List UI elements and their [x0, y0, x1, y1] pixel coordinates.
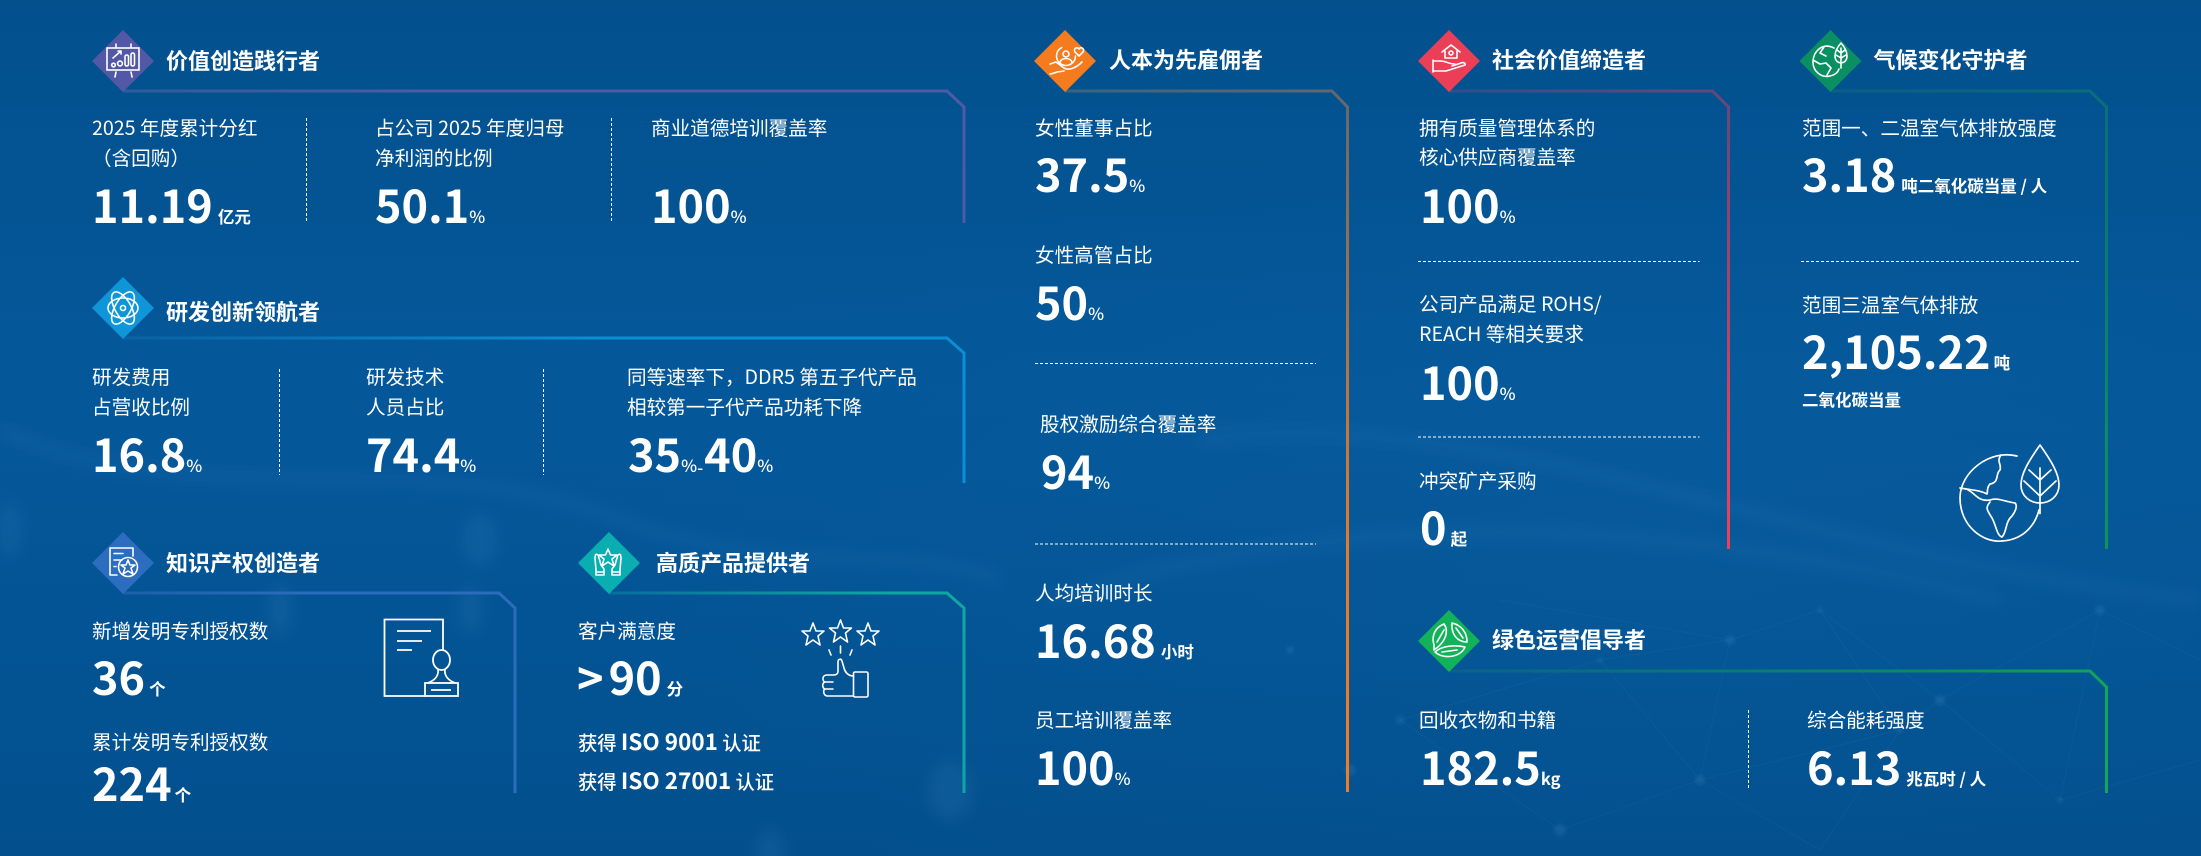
metric: 净利润比例: 50.1%: [375, 171, 485, 236]
metric: 回收衣物和书籍: [1419, 704, 1561, 798]
panel frame line: [123, 593, 515, 793]
panel: 研发创新领航者: [92, 277, 964, 485]
metric: 净利润比例: [375, 112, 564, 236]
metric: ROHS/REACH: 公司产品满足 ROHS/: [1419, 288, 1602, 317]
ISO certifications: [578, 725, 774, 796]
metric: 净利润比例: 净利润的比例: [375, 142, 493, 171]
metric: 分红: 2025 年度累计分红: [92, 112, 257, 141]
metric: 女性董事占比: [1035, 112, 1153, 205]
metric: DDR5 功耗: 相较第一子代产品功耗下降: [627, 391, 862, 420]
metric: 新增发明专利: 36个: [92, 643, 166, 708]
heading: 气候变化守护者: [1874, 43, 2028, 75]
heading: 高质产品提供者: [656, 546, 810, 578]
metric: 新增发明专利: 新增发明专利授权数: [92, 615, 269, 644]
icon: stars and thumbs up: [802, 620, 879, 697]
metric: 女性高管占比: [1035, 239, 1153, 333]
metric: 研发技术人员: 研发技术: [366, 361, 444, 390]
metric: 商业道德培训覆盖率: 商业道德培训覆盖率: [651, 112, 827, 141]
metric: 综合能耗强度: 综合能耗强度: [1807, 704, 1925, 733]
heading: 价值创造践行者: [166, 44, 320, 76]
panel: 知识产权创造者: [92, 532, 515, 814]
metric: DDR5 功耗: 35%: [628, 420, 697, 485]
metric: 研发费用: 占营收比例: [92, 391, 190, 420]
metric: 客户满意度: 客户满意度: [578, 615, 676, 644]
icon: house in hand: [1418, 30, 1480, 92]
ISO certifications: 获得 ISO 27001 认证: [578, 764, 774, 796]
icon: globe and leaf small: [1800, 30, 1862, 92]
heading: 绿色运营倡导者: [1492, 623, 1646, 655]
icon: people in hand: [1034, 30, 1096, 92]
metric: 研发技术人员: [366, 361, 476, 485]
panel frame line: [1065, 91, 1348, 792]
metric: 核心供应商: 拥有质量管理体系的: [1419, 112, 1595, 141]
metric: 分红: 11.19 亿元: [92, 171, 251, 236]
metric: 综合能耗强度: 6.13 兆瓦时 / 人: [1807, 733, 1987, 798]
metric: 范围三: 2,105.22吨: [1802, 317, 2011, 382]
panel: 社会价值缔造者: [1418, 30, 1728, 558]
metric: 冲突矿产采购: [1419, 465, 1537, 558]
icon: presentation board: [92, 30, 154, 92]
heading: 人本为先雇佣者: [1109, 43, 1263, 75]
metric: ROHS/REACH: [1419, 288, 1602, 413]
panel: 价值创造践行者: [92, 30, 964, 236]
metric: 分红: （含回购）: [92, 142, 190, 171]
metric: 回收衣物和书籍: 回收衣物和书籍: [1419, 704, 1556, 733]
ISO certifications: 获得 ISO 9001 认证: [578, 725, 761, 757]
metric: DDR5 功耗: %: [757, 452, 773, 477]
metric: DDR5 功耗: -: [697, 454, 703, 479]
metric: 回收衣物和书籍: 182.5kg: [1420, 733, 1561, 798]
metric: 女性高管占比: 50%: [1035, 268, 1104, 333]
metric: 女性董事占比: 女性董事占比: [1035, 112, 1153, 141]
metric: 范围一二: 范围一、二温室气体排放强度: [1802, 112, 2057, 141]
metric: 商业道德培训覆盖率: 100%: [651, 171, 747, 236]
icon: atom: [92, 277, 154, 339]
metric: 商业道德培训覆盖率: [651, 112, 827, 236]
metric: 净利润比例: 占公司 2025 年度归母: [375, 112, 564, 141]
metric: 股权激励: 94%: [1041, 437, 1110, 502]
heading: 研发创新领航者: [166, 295, 320, 327]
metric: ROHS/REACH: 100%: [1420, 348, 1516, 413]
icon: hands and star: [578, 532, 640, 594]
icon: certificate: [92, 532, 154, 594]
metric: 股权激励: 股权激励综合覆盖率: [1040, 408, 1216, 437]
metric: 研发技术人员: 74.4%: [366, 420, 476, 485]
metric: 核心供应商: 核心供应商覆盖率: [1419, 141, 1576, 170]
metric: 综合能耗强度: [1807, 704, 1987, 798]
heading: 社会价值缔造者: [1492, 43, 1646, 75]
metric: 冲突矿产采购: 0起: [1420, 493, 1468, 558]
panel frame line: [1449, 91, 1728, 549]
metric: 核心供应商: [1419, 112, 1595, 236]
metric: 分红: [92, 112, 257, 236]
metric: 女性董事占比: 37.5%: [1035, 140, 1145, 205]
metric: 人均培训时长: [1035, 577, 1194, 671]
panel frame line: [123, 91, 964, 223]
icon: document and stamp: [384, 620, 458, 696]
metric: 人均培训时长: 人均培训时长: [1035, 577, 1153, 606]
metric: ROHS/REACH: REACH 等相关要求: [1419, 318, 1584, 347]
panel: 气候变化守护者: [1800, 30, 2106, 549]
metric: 员工培训覆盖率: 100%: [1035, 733, 1131, 798]
panel: 人本为先雇佣者: [1034, 30, 1348, 798]
metric: 客户满意度: [577, 615, 684, 708]
metric: 新增发明专利: [92, 615, 269, 708]
metric: 研发费用: [92, 361, 202, 485]
panel: 绿色运营倡导者: [1418, 610, 2106, 798]
metric: 范围三: [1802, 289, 2011, 411]
metric: 股权激励: [1040, 408, 1216, 502]
panel frame line: [1449, 671, 2106, 793]
metric: 累计发明专利: [92, 726, 269, 814]
metric: DDR5 功耗: [627, 361, 917, 485]
metric: 冲突矿产采购: 冲突矿产采购: [1419, 465, 1537, 494]
panel frame line: [609, 593, 964, 793]
panel: 高质产品提供者: [577, 532, 964, 796]
metric: 员工培训覆盖率: [1035, 704, 1172, 798]
metric: 研发费用: 16.8%: [92, 420, 202, 485]
metric: DDR5 功耗: 40: [704, 420, 757, 485]
metric: 范围一二: 3.18 吨二氧化碳当量 / 人: [1802, 140, 2048, 205]
heading: 知识产权创造者: [166, 546, 320, 578]
metric: DDR5 功耗: 同等速率下，DDR5 第五子代产品: [627, 361, 917, 390]
metric: 范围一二: [1802, 112, 2057, 205]
metric: 累计发明专利: 224个: [92, 749, 192, 814]
panel frame line: [1830, 91, 2106, 549]
icon: globe and leaf: [1960, 445, 2059, 541]
metric: 核心供应商: 100%: [1420, 171, 1516, 236]
metric: 客户满意度: >90 分: [577, 643, 684, 708]
metric: 女性高管占比: 女性高管占比: [1035, 239, 1153, 268]
metric: 范围三: 二氧化碳当量: [1802, 387, 1901, 411]
metric: 研发费用: 研发费用: [92, 361, 170, 390]
metric: 人均培训时长: 16.68 小时: [1035, 606, 1194, 671]
metric: 员工培训覆盖率: 员工培训覆盖率: [1035, 704, 1172, 733]
metric: 研发技术人员: 人员占比: [366, 391, 444, 420]
metric: 累计发明专利: 累计发明专利授权数: [92, 726, 269, 755]
icon: recycling leaves: [1418, 610, 1480, 672]
panel frame line: [123, 338, 964, 483]
metric: 范围三: 范围三温室气体排放: [1802, 289, 1979, 318]
